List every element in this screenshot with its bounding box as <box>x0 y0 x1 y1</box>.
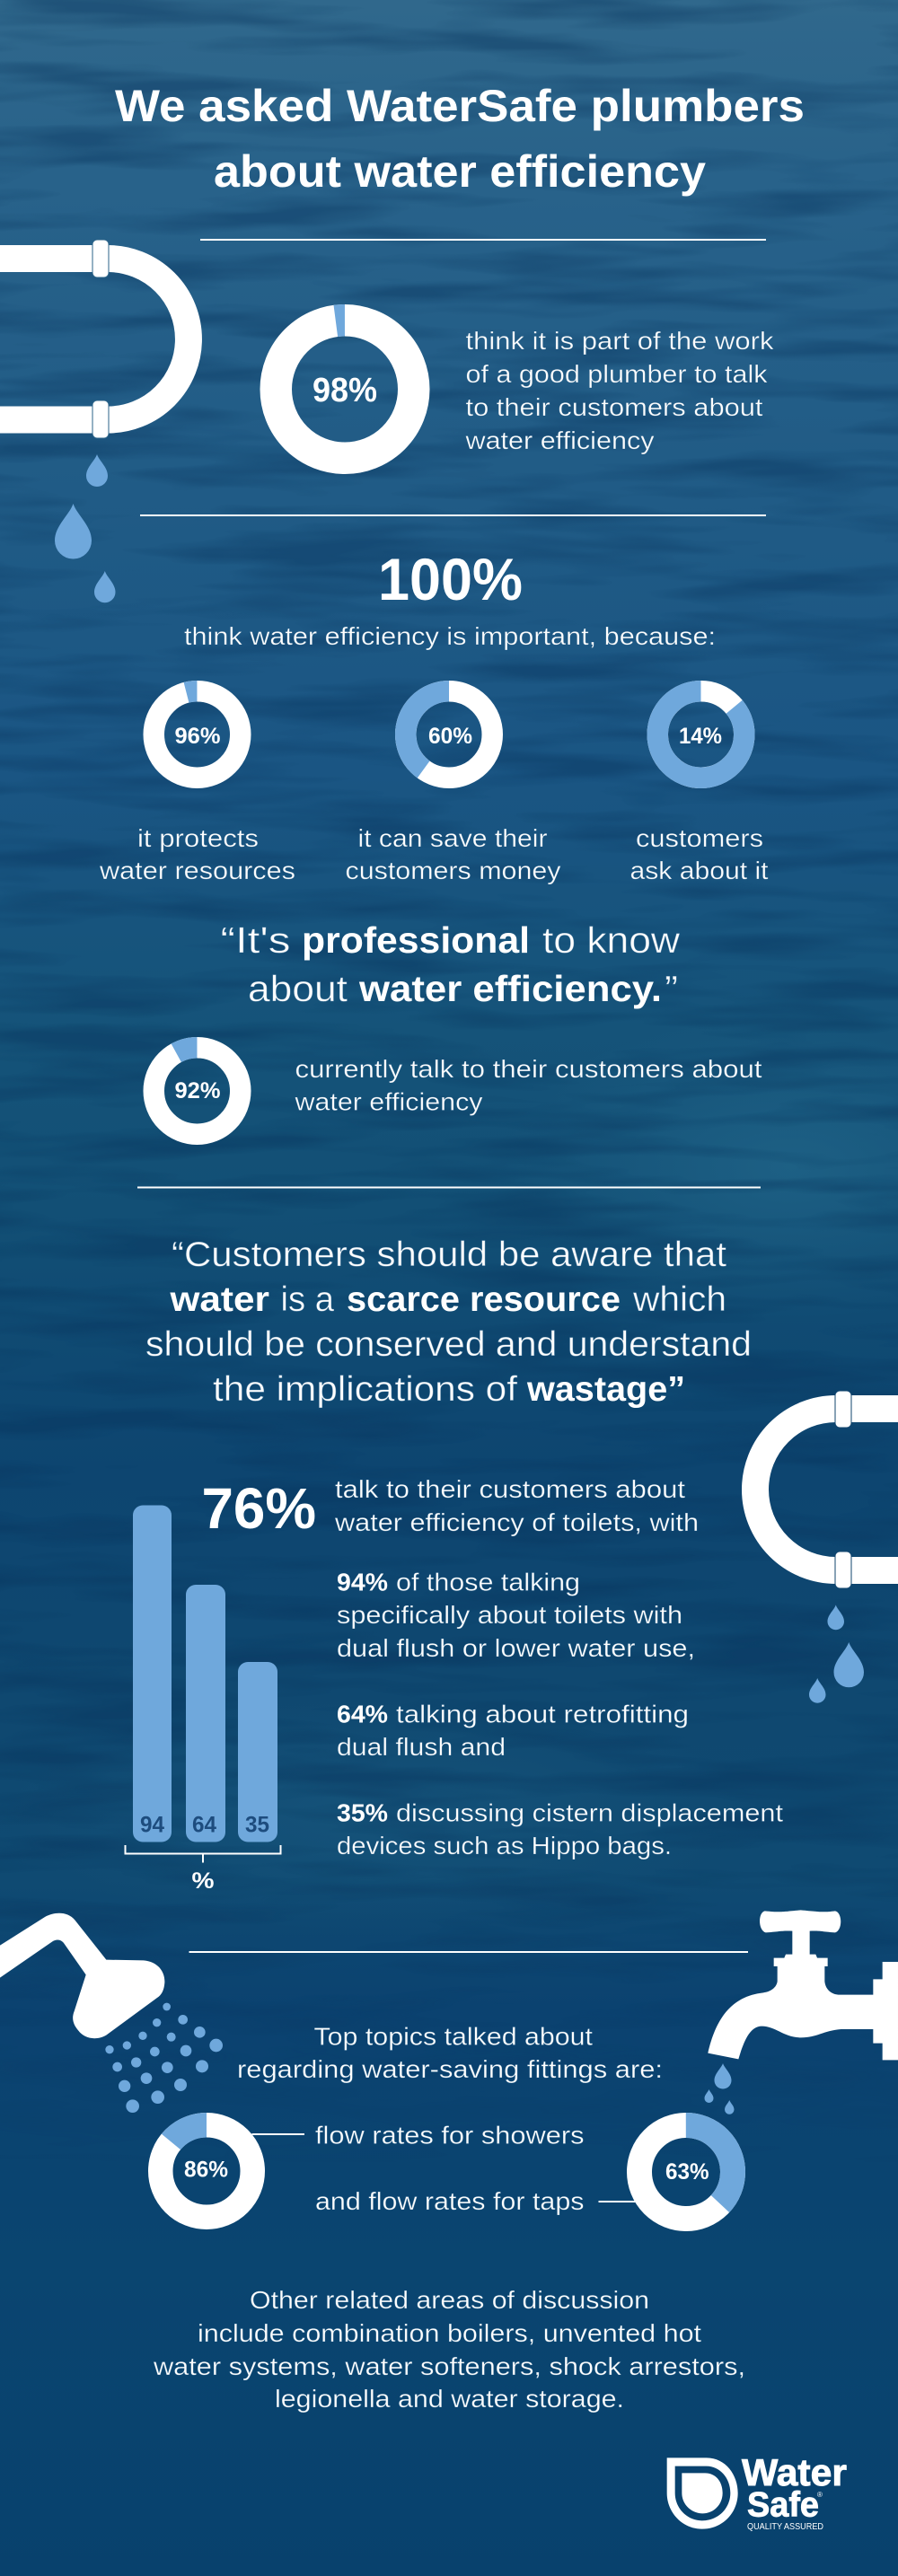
text: 94%: dual flush or lower water use, <box>337 1634 695 1662</box>
divider 4 <box>189 1951 748 1953</box>
donut chart: 92%: 92% <box>174 1078 221 1103</box>
title <box>115 81 805 197</box>
donut chart: 98%: 98% <box>313 372 377 409</box>
quote: professional: water efficiency. <box>358 968 662 1009</box>
panel: 14% customers ask: customers <box>636 824 763 852</box>
text: 98% description: think it is part of the work <box>465 327 775 355</box>
donut chart: 98% <box>268 312 422 466</box>
panel: 14% customers ask: 14% <box>679 724 722 749</box>
logo: WaterSafe: Safe <box>747 2485 819 2525</box>
quote: customers should be aware: water <box>169 1280 269 1319</box>
quote: customers should be aware: the implications of <box>213 1370 517 1409</box>
donut chart: 63% taps <box>639 2125 733 2219</box>
quote: customers should be aware: should be conserved and understand <box>145 1325 752 1364</box>
icon: leaking pipe top left <box>0 240 189 602</box>
text: 98% description <box>464 327 775 454</box>
donut chart: 92% <box>138 1032 256 1150</box>
text: toilets description: talk to their customers about <box>335 1475 685 1503</box>
quote: professional: professional <box>302 919 530 961</box>
text: 64% <box>337 1701 689 1761</box>
stat: 76%: 76% <box>201 1476 316 1541</box>
text: 35%: 35% <box>337 1799 388 1826</box>
panel: 60% save customers money: customers money <box>345 857 560 884</box>
icon: drops right <box>809 1605 864 1703</box>
icon: leaking pipe right <box>755 1391 898 1703</box>
text: 94%: of those talking <box>396 1568 580 1596</box>
divider 3 <box>137 1187 761 1189</box>
text: 64%: dual flush and <box>337 1733 506 1761</box>
panel: 96% protects water resources <box>99 681 295 884</box>
bar chart: toilets <box>126 1505 280 1894</box>
heading: 100%: 100% <box>378 546 523 612</box>
text: 92% description <box>294 1055 762 1115</box>
quote: professional: ” <box>665 968 678 1009</box>
quote: customers should be aware <box>145 1235 752 1409</box>
text: other related areas <box>153 2286 745 2413</box>
logo: WaterSafe <box>667 2451 847 2532</box>
panel: 96% protects water resources: 96% <box>174 724 221 749</box>
text: other related areas: include combination boilers, unvented hot <box>198 2319 701 2347</box>
text: 35%: devices such as Hippo bags. <box>337 1832 672 1859</box>
panel: 60% save customers money <box>345 674 560 884</box>
icon: shower spray <box>105 2003 223 2113</box>
text: 98% description: of a good plumber to talk <box>465 360 769 388</box>
panel: 60% save customers money: 60% <box>428 724 472 749</box>
panel: 14% customers ask: ask about it <box>630 857 769 884</box>
divider 1 <box>200 239 766 241</box>
text: 98% description: to their customers about <box>465 393 763 421</box>
text: 92% description: currently talk to their customers about <box>295 1055 762 1083</box>
bar chart: toilets: % <box>192 1868 214 1894</box>
text: 35% <box>337 1799 783 1859</box>
text: 64%: 64% <box>337 1701 388 1728</box>
quote: customers should be aware: which <box>632 1280 726 1319</box>
icon: shower head <box>0 1913 223 2113</box>
text: toilets description: water efficiency of toilets, with <box>334 1508 699 1536</box>
icon: tap drops <box>704 2063 735 2114</box>
quote: professional <box>221 919 680 1009</box>
text: toilets description <box>334 1475 699 1536</box>
text: top topics: regarding water-saving fittings are: <box>237 2055 663 2083</box>
donut chart: 86% showers <box>142 2106 271 2236</box>
text: other related areas: Other related areas of discussion <box>250 2286 649 2314</box>
donut chart: 86% showers: 86% <box>184 2157 228 2182</box>
icon: drops <box>55 454 115 602</box>
background: sea <box>0 0 898 1911</box>
label: flow rates for taps: and flow rates for taps <box>315 2187 584 2215</box>
title: We asked WaterSafe plumbers <box>115 81 805 131</box>
logo: WaterSafe: QUALITY ASSURED <box>747 2521 823 2532</box>
quote: customers should be aware: scarce resource <box>347 1280 621 1319</box>
donut chart: 63% taps: 63% <box>665 2159 709 2185</box>
quote: professional: about <box>248 968 348 1009</box>
quote: customers should be aware: is a <box>280 1280 334 1319</box>
panel: 96% protects water resources: it protects <box>137 824 259 852</box>
panel: 14% customers ask <box>630 673 769 884</box>
divider 2 <box>140 514 766 516</box>
panel: 60% save customers money: it can save their <box>357 824 548 852</box>
text: 64%: talking about retrofitting <box>396 1701 689 1728</box>
quote: professional: “It's <box>221 919 291 961</box>
panel: 96% protects water resources: water resources <box>99 857 295 884</box>
text: 98% description: water efficiency <box>464 426 654 454</box>
quote: customers should be aware: “Customers should be aware that <box>172 1235 726 1274</box>
quote: professional: to know <box>542 919 680 961</box>
bar chart: toilets: 64 <box>192 1812 216 1837</box>
bar chart: toilets: 35 <box>245 1812 269 1837</box>
icon: tap <box>704 1910 898 2114</box>
text: 94% <box>337 1568 695 1662</box>
quote: customers should be aware: wastage” <box>526 1370 685 1409</box>
text: 94%: specifically about toilets with <box>337 1601 682 1629</box>
text: other related areas: legionella and water storage. <box>275 2385 624 2413</box>
text: 92% description: water efficiency <box>294 1088 483 1115</box>
logo: WaterSafe: ® <box>817 2491 823 2499</box>
logo: WaterSafe: Water <box>742 2451 847 2493</box>
text: other related areas: water systems, water softeners, shock arrestors, <box>153 2352 745 2380</box>
text: top topics <box>237 2022 663 2083</box>
bar chart: toilets: 94 <box>140 1812 164 1837</box>
label: flow rates for showers: flow rates for showers <box>315 2121 584 2150</box>
text: think water efficiency is important: think water efficiency is important, because: <box>184 622 716 650</box>
text: top topics: Top topics talked about <box>314 2022 593 2051</box>
text: 94%: 94% <box>337 1568 388 1596</box>
title: about water efficiency <box>214 146 706 197</box>
text: 35%: discussing cistern displacement <box>396 1799 783 1826</box>
